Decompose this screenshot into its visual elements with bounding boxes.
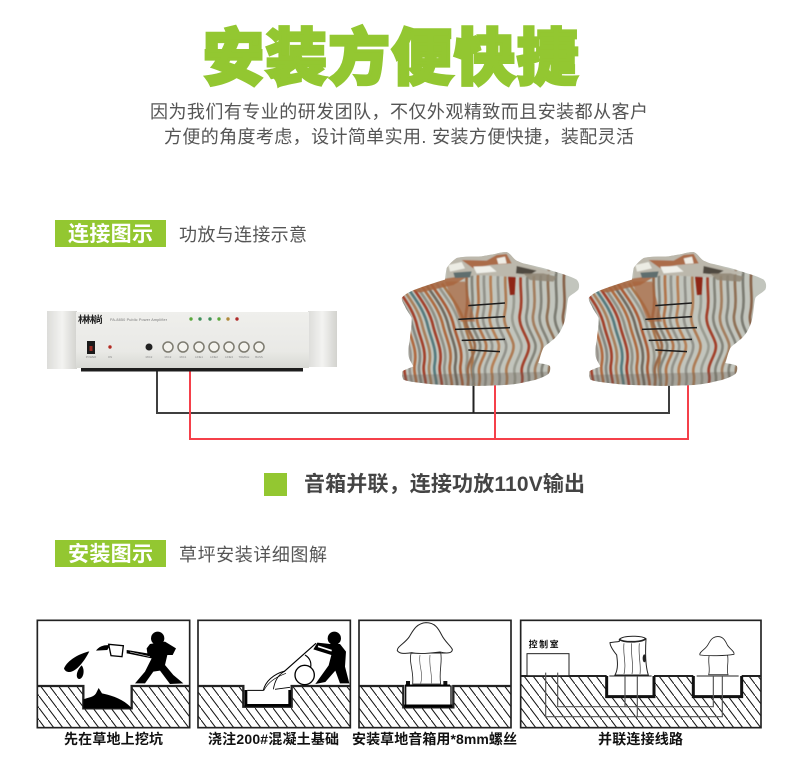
caption: wiring: 并联连接线路 [598,731,683,747]
amplifier: MIC1 [180,355,187,359]
section heading: connection diagram [55,220,307,247]
caption: digging: 先在草地上挖坑 [64,731,163,747]
amplifier: BASS [255,355,263,359]
amplifier: MIC2 [146,355,153,359]
section heading: installation diagram [55,540,327,567]
amplifier: LINE2 [210,355,218,359]
section heading: installation diagram: 安装图示 [68,543,153,566]
amplifier: PA-8850 Public Power Amplifier [110,318,168,322]
amplifier: MIC2 [165,355,172,359]
panel: parallel wiring [521,620,761,728]
panel: mounting the speaker [359,620,511,728]
amplifier: LINE1 [195,355,203,359]
speaker: left rock speaker [370,247,583,390]
section heading: connection diagram: 连接图示 [68,223,153,246]
amplifier: ON [108,355,112,359]
amplifier: 林林尚 [78,314,103,326]
wires: black [157,370,669,413]
intro text [150,102,648,147]
title: 安装方便快捷 [203,24,578,92]
amplifier [47,311,337,372]
amplifier: POWER [86,355,96,359]
amplifier: TREBLE [239,355,250,359]
caption: pouring: 浇注200#混凝土基础 [208,731,339,747]
panel: pouring concrete [198,620,350,728]
amplifier: LINE3 [225,355,233,359]
section heading: installation diagram: 草坪安装详细图解 [179,545,327,565]
wires: red [190,370,688,439]
panel: parallel wiring: 控制室 [529,638,559,649]
intro text: 方便的角度考虑，设计简单实用. 安装方便快捷，装配灵活 [164,127,634,147]
caption: mounting: 安装草地音箱用*8mm螺丝 [352,731,517,747]
section heading: connection diagram: 功放与连接示意 [179,225,307,245]
legend caption: 音箱并联，连接功放110V输出 [304,472,585,496]
panel: digging the pit [37,620,190,728]
speaker: right rock speaker [557,247,770,390]
intro text: 因为我们有专业的研发团队，不仅外观精致而且安装都从客户 [150,102,648,122]
